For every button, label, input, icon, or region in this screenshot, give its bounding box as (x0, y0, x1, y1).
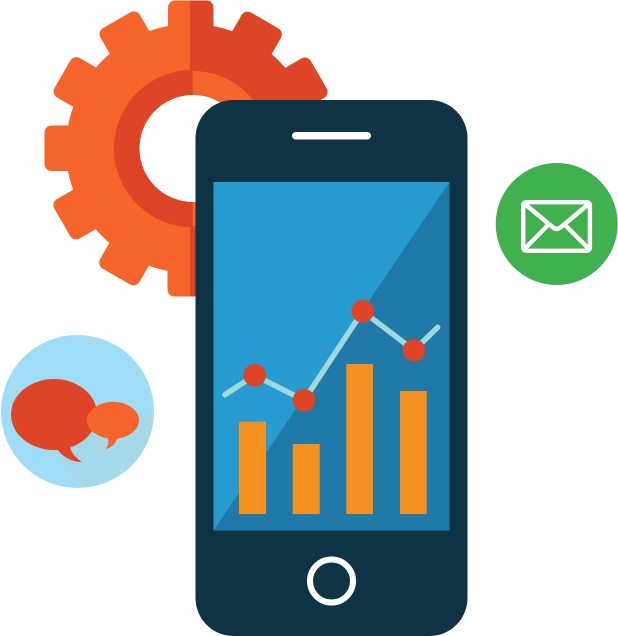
phone screen (214, 182, 450, 530)
small bubble tail (106, 437, 118, 449)
data point 2 (293, 389, 315, 412)
trend line (225, 311, 438, 400)
large bubble tail (57, 446, 82, 462)
bar 4 (400, 391, 427, 514)
large speech bubble (11, 379, 97, 462)
gear ring right half (193, 71, 270, 226)
data point 1 (243, 364, 266, 387)
bar chart (239, 364, 427, 514)
phone body (196, 100, 468, 636)
data point 3 (351, 300, 374, 323)
icon: email (496, 163, 618, 285)
icon: chat bubbles (1, 335, 160, 494)
icon: gear (44, 0, 338, 296)
envelope outline (523, 202, 590, 251)
screen shadow (214, 182, 450, 530)
gear ring left half (114, 70, 193, 227)
envelope right fold (565, 225, 587, 247)
data point 4 (403, 339, 425, 362)
phone home button (310, 560, 353, 602)
bar 3 (346, 364, 373, 514)
chat background circle (1, 335, 154, 488)
chat long shadow (54, 410, 154, 488)
large bubble body (11, 379, 97, 450)
small bubble body (87, 402, 139, 439)
gear left half (44, 0, 190, 296)
envelope flap (526, 205, 588, 229)
bar 2 (293, 444, 320, 514)
icon: phone (196, 100, 468, 636)
bar 1 (239, 422, 266, 514)
phone speaker (292, 132, 371, 140)
line chart (225, 300, 438, 412)
gear hole (140, 95, 246, 202)
email circle (496, 163, 618, 285)
gear right half (190, 0, 328, 296)
small speech bubble (87, 402, 139, 449)
envelope left fold (526, 225, 548, 247)
envelope (523, 202, 590, 251)
